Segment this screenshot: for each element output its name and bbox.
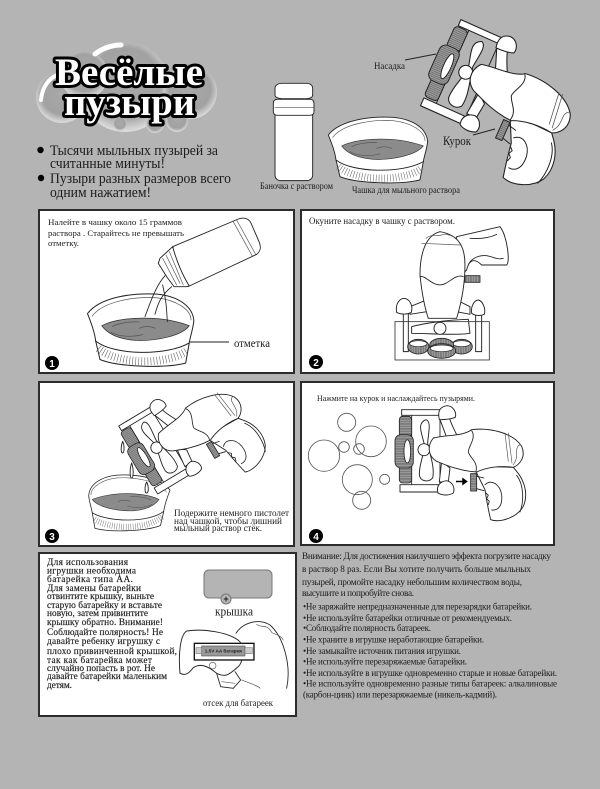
gun dipped from above [395, 227, 508, 360]
feature bullet list: Тысячи мыльных пузырей за [50, 143, 219, 159]
bowl [87, 294, 194, 366]
feature bullet list: считанные минуты! [50, 156, 165, 172]
attention text: в раствор 8 раз. Если Вы хотите получить больше мыльных [302, 564, 531, 574]
battery instructions: Для замены батарейки [47, 583, 141, 594]
battery instructions: батарейка типа АА. [47, 574, 133, 585]
step number 1: 1 [49, 359, 55, 370]
step 1 instruction: Налейте в чашку около 15 граммов [48, 217, 182, 227]
cover label: крышка [215, 605, 253, 619]
panel: battery [39, 553, 296, 716]
battery safety list: •Не используйте перезаряжаемые батарейки. [303, 657, 467, 667]
battery instructions: крышку обратно. Внимание! [47, 617, 163, 628]
battery instructions: Для использования [47, 558, 129, 568]
attention text [302, 551, 551, 598]
attention text: высушите и попробуйте снова. [302, 588, 414, 598]
step 1 instruction [48, 217, 184, 248]
panel: step 3 [39, 362, 294, 546]
battery compartment drawing: 1.5V AA батарея [205, 647, 242, 653]
step 3 instruction: мыльный раствор стёк. [174, 523, 262, 533]
step number 1 [45, 356, 59, 370]
battery instructions: отвинтите крышку, выньте [47, 592, 154, 602]
battery compartment drawing [179, 622, 288, 688]
bubble gun side view [395, 406, 526, 521]
attention text: Внимание: Для достижения наилучшего эффекта погрузите насадку [302, 551, 551, 561]
battery instructions: Соблюдайте полярность! Не [47, 627, 163, 638]
battery cover [204, 570, 272, 604]
battery instructions: случайно попасть в рот. Не [47, 663, 155, 674]
battery instructions: старую батарейку и вставьте [47, 600, 162, 611]
battery safety list: •Не храните в игрушке неработающие батарейки. [303, 635, 484, 645]
label: jar: Баночка с раствором [260, 182, 333, 192]
step number 4: 4 [313, 532, 319, 543]
label: nozzle: Насадка [374, 62, 406, 72]
mark label: отметка [234, 338, 270, 350]
step 1 instruction: раствора . Старайтесь не превышать [48, 228, 184, 238]
label: trigger: Курок [443, 134, 472, 148]
arrow: press trigger [456, 479, 466, 484]
step number 3 [45, 529, 59, 543]
bowl [89, 475, 170, 531]
bubbles [308, 413, 390, 509]
battery safety list [303, 601, 557, 700]
step number 2: 2 [313, 358, 319, 369]
title logo with bubbles [36, 42, 217, 133]
leader: nozzle [405, 54, 436, 60]
panel: step 4 [301, 382, 554, 545]
feature bullet list [37, 143, 231, 201]
leader: trigger [473, 129, 495, 135]
battery safety list: •Соблюдайте полярность батареек. [303, 623, 431, 633]
panel: step 2 [301, 210, 554, 373]
battery instructions: давайте ребенку игрушку с [47, 636, 160, 647]
battery instructions [47, 558, 177, 691]
feature bullet list: одним нажатием! [50, 185, 151, 201]
compartment label: отсек для батареек [203, 698, 273, 709]
step 3 instruction [174, 508, 289, 533]
battery instructions: новую, затем привинтите [47, 609, 148, 619]
step number 2 [309, 355, 323, 369]
battery safety list: •Не используйте одновременно разные типы батареек: алкалиновые [303, 679, 557, 689]
bowl for solution [328, 117, 428, 183]
gun held over bowl [111, 362, 274, 520]
mark leader line [190, 341, 229, 343]
battery cover: + [223, 594, 229, 604]
step 3 instruction: над чашкой, чтобы лишний [174, 516, 282, 526]
step 1 instruction: отметку. [48, 238, 79, 248]
bottle pouring [145, 218, 260, 322]
step 3 instruction: Подержите немного пистолет [174, 508, 289, 518]
attention text: пузырей, промойте насадку небольшим количеством воды, [302, 577, 522, 587]
title logo with bubbles: пузыри [64, 81, 195, 124]
battery instructions: игрушки необходима [47, 566, 136, 576]
label: bowl: Чашка для мыльного раствора [352, 186, 461, 196]
jar of solution [273, 83, 314, 181]
battery instructions: детям. [47, 681, 72, 691]
step 4 instruction: Нажмите на курок и наслаждайтесь пузырями. [317, 393, 475, 403]
step number 3: 3 [49, 532, 55, 543]
step number 4 [309, 529, 323, 543]
battery safety list: •Не используйте в игрушке одновременно старые и новые батарейки. [303, 668, 557, 678]
feature bullet list: Пузыри разных размеров всего [50, 171, 231, 187]
step 2 instruction: Окуните насадку в чашку с раствором. [309, 216, 455, 226]
battery safety list: •Не заряжайте непредназначенные для перезарядки батарейки. [303, 601, 532, 611]
panel: step 1 [39, 210, 294, 373]
battery safety list: •Не замыкайте источник питания игрушки. [303, 646, 461, 656]
bubble gun illustration [402, 12, 594, 195]
battery instructions: плохо привинченной крышкой, [47, 646, 177, 657]
title logo with bubbles: Весёлые [55, 51, 203, 94]
battery instructions: так как батарейка может [47, 655, 152, 666]
drips [121, 441, 148, 493]
battery safety list: (карбон-цинк) или перезаряжаемые (никель-кадмий). [303, 690, 497, 700]
battery instructions: давайте батарейки маленьким [47, 671, 167, 682]
battery safety list: •Не используйте батарейки отличные от рекомендуемых. [303, 613, 512, 623]
